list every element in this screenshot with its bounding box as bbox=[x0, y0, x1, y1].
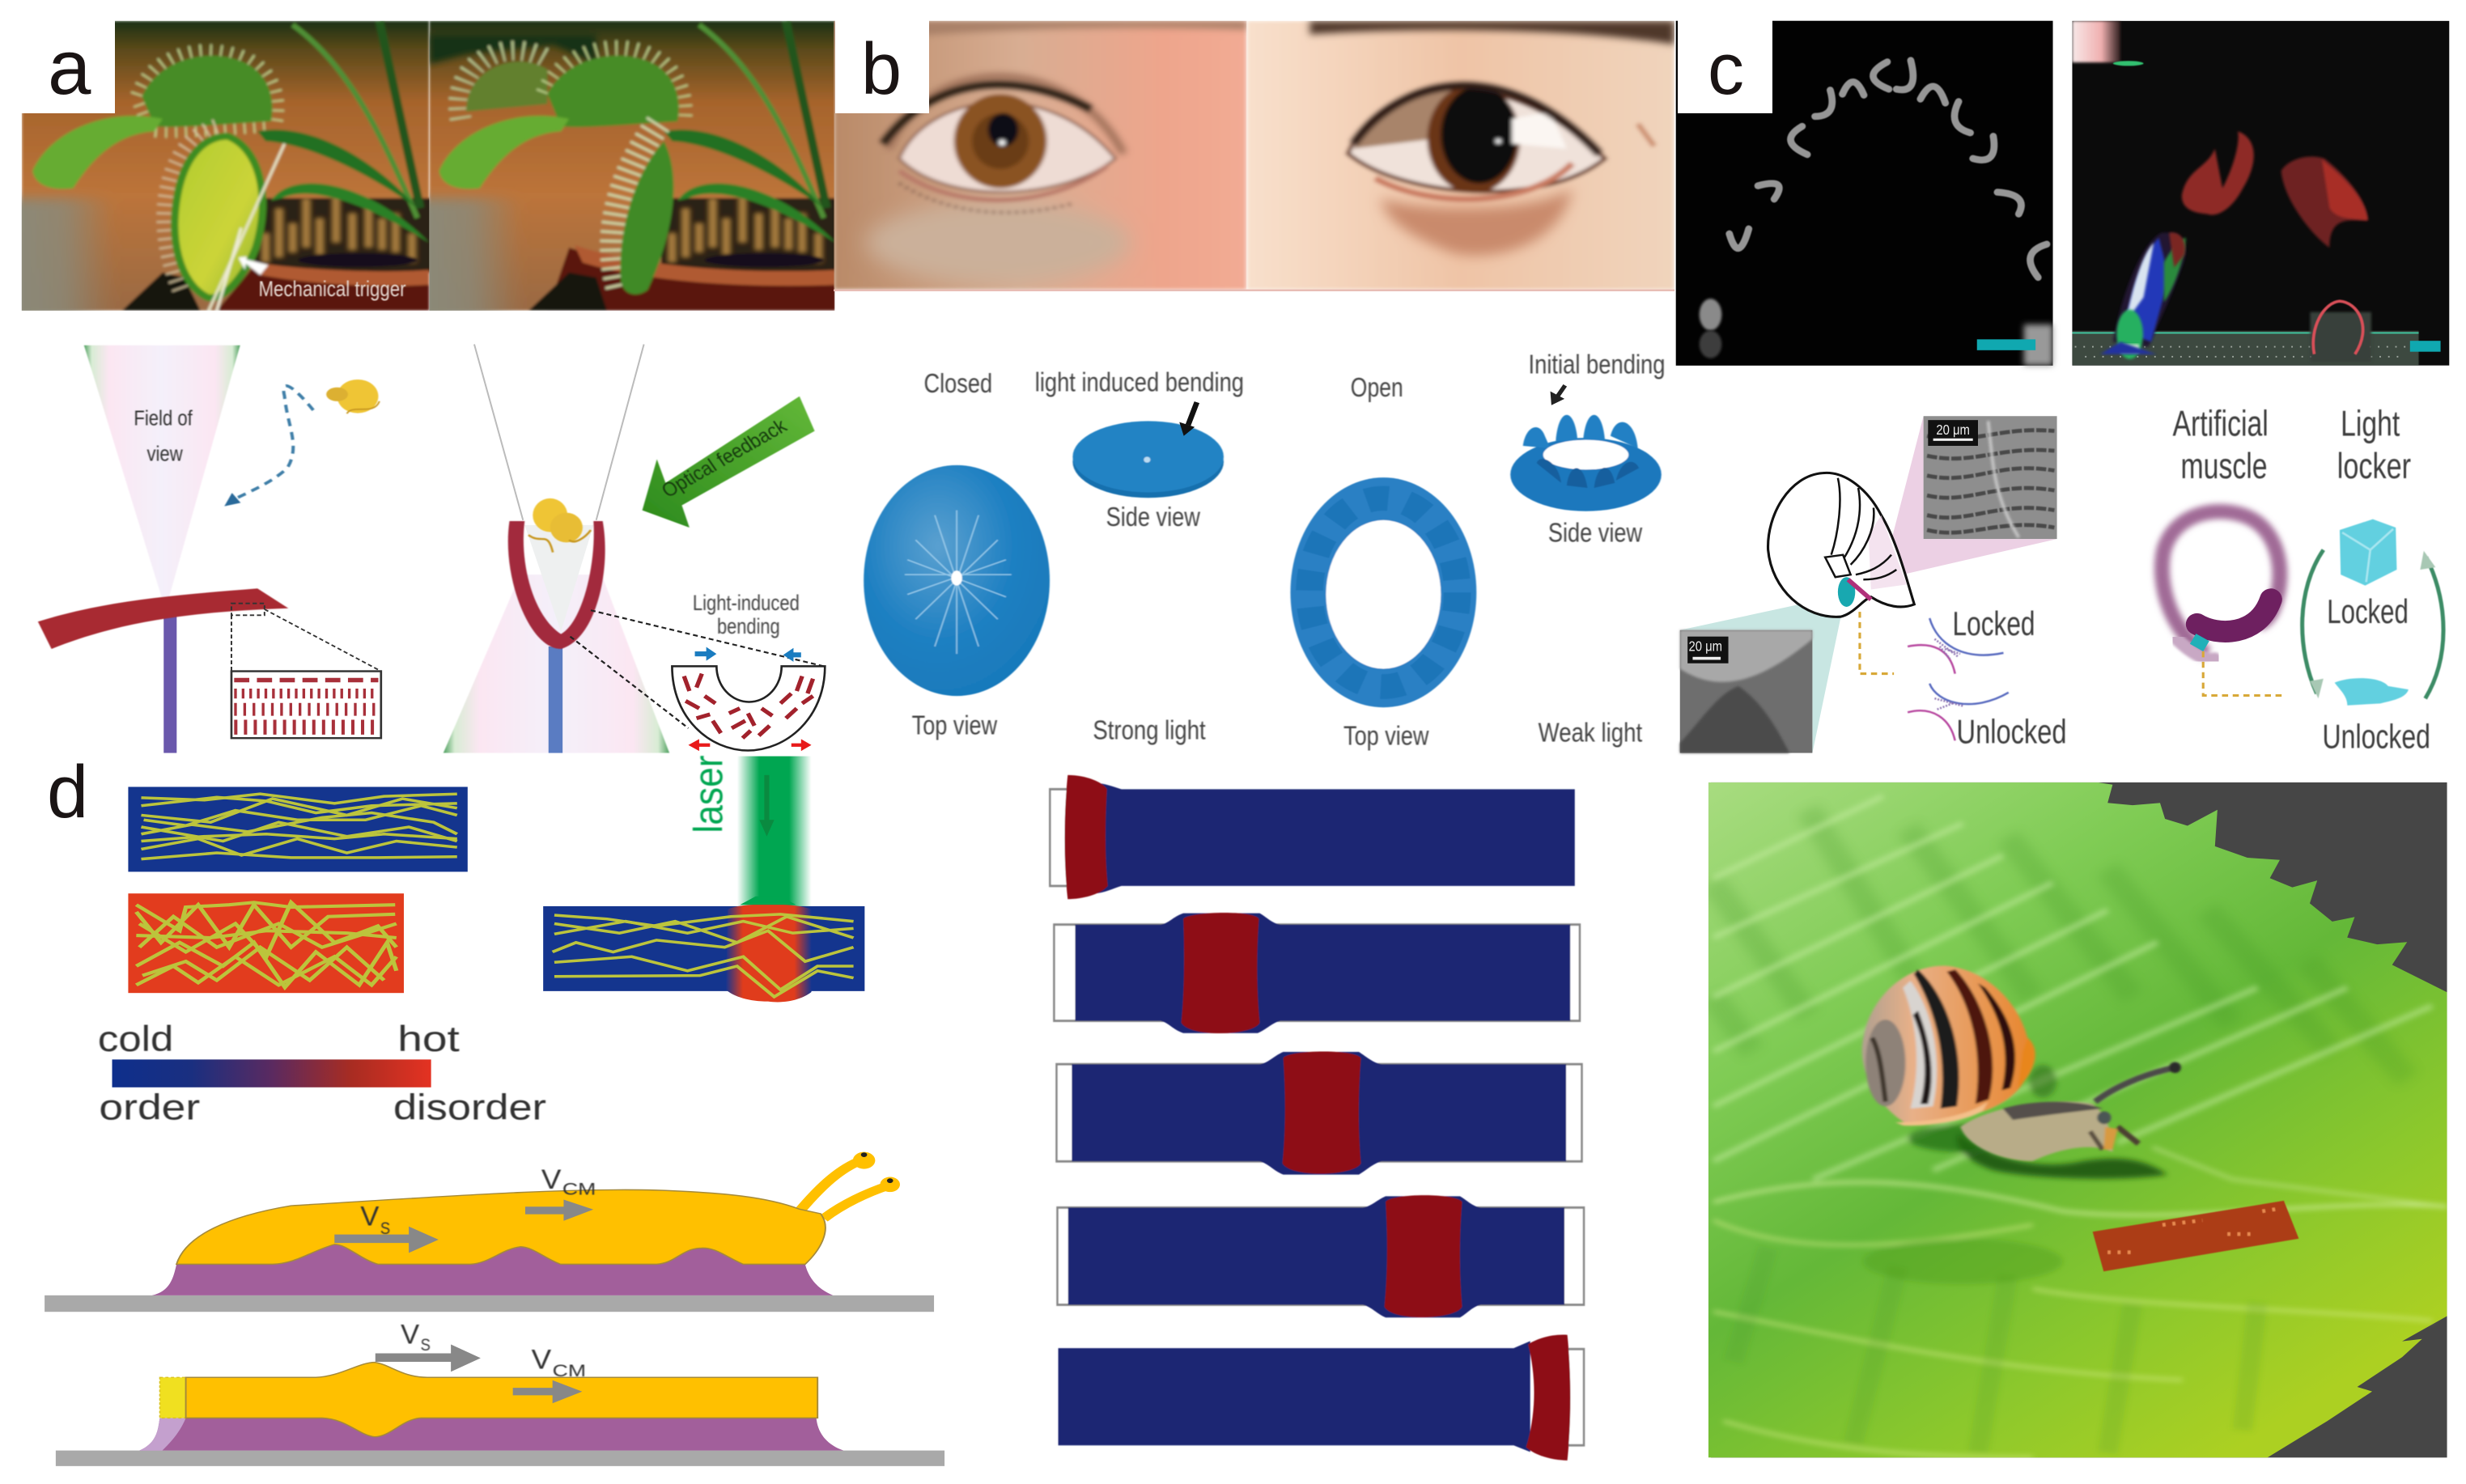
optical fibre bbox=[163, 614, 176, 753]
photo: jumping crescent, time lapse bbox=[1676, 21, 2053, 366]
photo: eye with constricted pupil bbox=[834, 21, 1246, 290]
icon: yellow bug bbox=[326, 379, 380, 413]
frame 2 bbox=[1054, 913, 1580, 1033]
arrow: Vs velocity bbox=[334, 1202, 439, 1253]
panel b: iris and iris-inspired lens bbox=[834, 21, 1674, 751]
background bbox=[1711, 782, 2447, 1457]
legend: cold to hot colour bar: order bbox=[99, 1087, 200, 1127]
label: Unlocked right: Unlocked bbox=[2323, 718, 2430, 755]
labels: lens captions: Strong light bbox=[1093, 714, 1206, 745]
arrow: Vcm velocity: V bbox=[541, 1164, 562, 1195]
arrow: Vs velocity strip: V bbox=[401, 1319, 420, 1350]
letter b: b bbox=[861, 29, 902, 110]
field of view cone bbox=[84, 346, 240, 597]
labels: lens captions: light induced bending bbox=[1035, 367, 1244, 397]
red light-driven robot strip bbox=[2093, 1201, 2298, 1271]
pink zoom fan bbox=[1881, 416, 2057, 579]
photo: gripper catching falling object bbox=[2052, 21, 2455, 366]
diagram: cold ordered network bbox=[128, 787, 468, 871]
labels: lens captions: Side view bbox=[1106, 502, 1200, 532]
leaf cell shading bbox=[1713, 810, 2407, 1079]
arrow: Optical feedback: Optical feedback bbox=[658, 415, 791, 502]
labels: lens captions: Top view bbox=[1343, 720, 1429, 751]
inset: molecular alignment bbox=[231, 604, 381, 738]
diagram: strip travelling wave bbox=[56, 1319, 944, 1466]
arrow: Vcm velocity: CM bbox=[562, 1181, 596, 1199]
photo: flytrap open with mechanical trigger bbox=[6, 21, 434, 327]
label: Light-induced bending: bending bbox=[717, 613, 780, 638]
arrow: Vs velocity: S bbox=[380, 1219, 390, 1238]
letter d: d bbox=[47, 751, 88, 833]
frame 4 bbox=[1058, 1195, 1584, 1317]
lower light cone bbox=[444, 575, 669, 753]
photo: snail beside robot strip on a leaf bbox=[1708, 782, 2447, 1457]
letter a bbox=[0, 0, 115, 113]
icon: closed lens top view bbox=[864, 465, 1050, 696]
labels: lens captions: Open bbox=[1351, 371, 1403, 402]
labels: Artificial muscle and Light locker: Artificial bbox=[2172, 405, 2269, 444]
arrow: dashed callout left bbox=[1860, 612, 1894, 674]
label: Field of view bbox=[134, 406, 193, 465]
shell outline bbox=[1768, 473, 1914, 617]
labels: lens captions: Top view bbox=[912, 710, 997, 740]
arrow: bending indicator open bbox=[1551, 385, 1565, 405]
legend: cold to hot colour bar: cold bbox=[98, 1019, 173, 1058]
labels: Artificial muscle and Light locker bbox=[2172, 405, 2411, 486]
image: SEM muscle with scale bbox=[1924, 416, 2057, 539]
label: Light-induced bending: Light-induced bbox=[693, 590, 800, 615]
arrow: Vcm velocity strip bbox=[513, 1345, 586, 1403]
snail shell bbox=[1862, 966, 2035, 1126]
bent gripper bbox=[508, 521, 605, 649]
image: SEM locker with scale bbox=[1680, 630, 1812, 753]
simulation: travelling heated zone in five frames bbox=[1050, 775, 1584, 1461]
letter c bbox=[1678, 0, 1772, 113]
inner pale view cone bbox=[524, 525, 593, 632]
letter a: a bbox=[48, 24, 91, 111]
upper view lines bbox=[474, 344, 644, 520]
label: laser: laser bbox=[685, 755, 732, 833]
panel a: Venus flytrap and light-driven gripper bbox=[6, 21, 840, 753]
arrow: bending indicator closed bbox=[1179, 402, 1197, 436]
arrow: Vcm velocity strip: CM bbox=[553, 1362, 586, 1380]
label: Light-induced bending bbox=[693, 590, 800, 638]
legend: cold to hot colour bar: disorder bbox=[393, 1087, 546, 1127]
labels: lens captions: Weak light bbox=[1539, 717, 1642, 748]
labels: lens captions bbox=[912, 349, 1666, 751]
arrows: strain directions bbox=[689, 647, 812, 751]
bug caught bbox=[528, 498, 591, 553]
icon: open lens top view bbox=[1290, 477, 1476, 707]
diagram: hot disordered network bbox=[128, 893, 404, 993]
strip with hot zone bbox=[543, 897, 864, 1002]
diagram: LCE gripper closed on bug bbox=[444, 344, 825, 753]
icon: melted ice unlocked bbox=[2335, 678, 2409, 706]
image: SEM muscle with scale: 20 μm bbox=[1936, 422, 1970, 438]
leaf bbox=[1708, 782, 2447, 1457]
panel d: light-driven travelling wave locomotion bbox=[45, 755, 944, 1466]
arrows: lock cycle bbox=[2303, 550, 2443, 698]
icon: artificial muscle ring bbox=[2162, 511, 2280, 659]
laser beam bbox=[737, 757, 812, 907]
arrow: Vs velocity: V bbox=[360, 1202, 380, 1232]
labels: Artificial muscle and Light locker: muscle bbox=[2181, 447, 2268, 486]
arrow: Vcm velocity bbox=[525, 1164, 596, 1221]
arrow: Optical feedback bbox=[643, 396, 815, 528]
legend: cold to hot colour bar bbox=[98, 1019, 546, 1127]
labels: lens captions: Closed bbox=[924, 367, 992, 398]
diagram: snail shell with muscle bbox=[1680, 416, 2057, 753]
label: Locked right: Locked bbox=[2327, 593, 2409, 630]
icon: open lens side view bbox=[1510, 415, 1662, 511]
arrow: Vs velocity strip bbox=[376, 1319, 481, 1372]
inset: disordered bent section bbox=[571, 610, 825, 750]
labels: Locked and Unlocked, left: Unlocked bbox=[1957, 713, 2067, 750]
diagram: LCE gripper open with field of view bbox=[38, 346, 381, 753]
labels: lens captions: Initial bending bbox=[1529, 349, 1666, 379]
panel c: snail muscle locking and light-powered jumping bbox=[1676, 21, 2455, 755]
letter b bbox=[835, 0, 929, 113]
icon: locked and unlocked fibres bbox=[1908, 618, 2009, 740]
label: Mechanical trigger: Mechanical trigger bbox=[258, 276, 406, 301]
red bent film bbox=[38, 588, 288, 649]
label: Field of view: Field of bbox=[134, 406, 193, 430]
arrow: Vs velocity strip: S bbox=[421, 1336, 431, 1355]
letter c: c bbox=[1708, 29, 1744, 110]
labels: Artificial muscle and Light locker: Light bbox=[2341, 405, 2400, 444]
frame 3 bbox=[1057, 1052, 1581, 1175]
icon: closed lens side view bbox=[1072, 421, 1224, 498]
fibre bbox=[549, 647, 562, 753]
panel letters bbox=[0, 0, 1772, 833]
diagram: snail travelling wave bbox=[45, 1152, 934, 1312]
frame 1 bbox=[1050, 775, 1575, 899]
label: Field of view: view bbox=[146, 442, 183, 465]
image: SEM locker with scale: 20 μm bbox=[1688, 638, 1722, 654]
labels: lens captions: Side view bbox=[1548, 517, 1642, 548]
photo: flytrap closed bbox=[413, 21, 840, 327]
photo: eye with dilated pupil bbox=[1246, 21, 1674, 290]
frame 5 bbox=[1059, 1335, 1584, 1461]
arrow: dashed callout right bbox=[2203, 651, 2284, 696]
labels: Artificial muscle and Light locker: locker bbox=[2337, 447, 2411, 486]
icon: ice cube locked bbox=[2340, 519, 2396, 586]
labels: Locked and Unlocked, left bbox=[1953, 604, 2067, 750]
snail body and tentacles bbox=[1960, 1062, 2181, 1161]
labels: Locked and Unlocked, left: Locked bbox=[1953, 604, 2035, 642]
arrow: dashed path of bug bbox=[224, 386, 313, 507]
legend: cold to hot colour bar: hot bbox=[397, 1019, 460, 1058]
leaf veins and texture bbox=[1713, 796, 2447, 1457]
arrow: Vcm velocity strip: V bbox=[532, 1345, 552, 1375]
diagram: laser heated strip bbox=[543, 755, 864, 1002]
